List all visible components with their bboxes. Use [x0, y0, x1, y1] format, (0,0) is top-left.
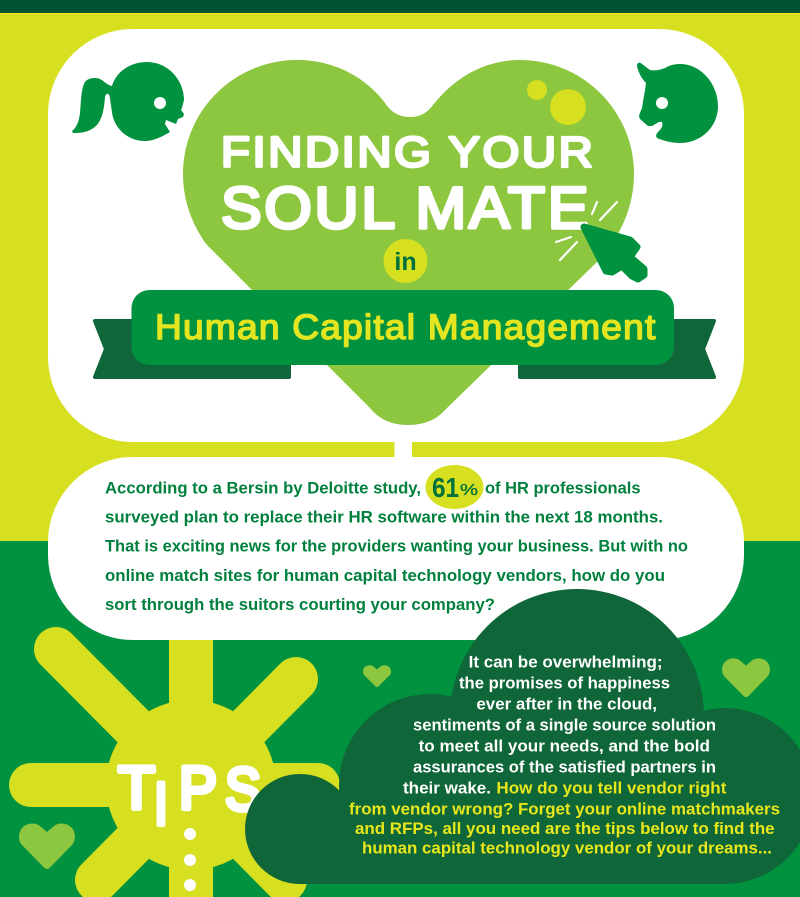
- tips heading: S: [225, 756, 261, 823]
- cloud text: It can be overwhelming;: [469, 654, 663, 672]
- tips dots: [184, 828, 196, 891]
- intro paragraph: That is exciting news for the providers wanting your business. But with no: [105, 538, 688, 556]
- intro paragraph: sort through the suitors courting your company?: [105, 596, 495, 614]
- cloud text: assurances of the satisfied partners in: [413, 758, 716, 776]
- intro paragraph: of HR professionals: [485, 480, 640, 498]
- 61% highlight: 61: [432, 472, 459, 503]
- intro paragraph: online match sites for human capital technology vendors, how do you: [105, 567, 665, 585]
- intro paragraph: According to a Bersin by Deloitte study,: [105, 480, 421, 498]
- tips heading: [118, 754, 261, 838]
- panel: intro text card: [48, 457, 744, 640]
- intro paragraph: [105, 480, 688, 614]
- connector between panels: [394, 440, 412, 460]
- cloud text: from vendor wrong? Forget your online matchmakers: [349, 800, 780, 818]
- tips heading: P: [179, 754, 217, 822]
- panel: title card: [48, 29, 744, 442]
- cloud text: ever after in the cloud,: [476, 696, 657, 714]
- ribbon banner: [95, 290, 714, 377]
- ribbon main bar: [132, 290, 674, 365]
- dark green cloud: [245, 589, 800, 884]
- heart: right: [722, 658, 770, 697]
- heart: lower left: [19, 823, 75, 869]
- cloud text: human capital technology vendor of your dreams...: [362, 840, 772, 858]
- cloud text: and RFPs, all you need are the tips below to find the: [355, 820, 775, 838]
- icon: girl head: [72, 62, 184, 141]
- 61% highlight: %: [460, 482, 478, 499]
- background: lime upper section: [0, 0, 800, 541]
- title: finding your soul mate: SOUL MATE: [221, 175, 588, 241]
- intro paragraph: surveyed plan to replace their HR software within the next 18 months.: [105, 509, 663, 527]
- badge: in: in: [394, 248, 417, 276]
- icon: boy head: [637, 63, 718, 143]
- tips heading: I: [154, 770, 168, 838]
- ribbon tail: right: [520, 321, 714, 377]
- cloud text: the promises of happiness: [459, 675, 670, 693]
- icon: cursor arrow with sparks: [556, 202, 644, 279]
- cloud text: [349, 654, 780, 858]
- ribbon tail: left: [95, 321, 289, 377]
- decorative lime bubbles: [527, 80, 586, 125]
- badge: in: [384, 239, 428, 283]
- tips sun icon: [31, 630, 318, 897]
- cloud text: sentiments of a single source solution: [413, 716, 716, 734]
- title: finding your soul mate: FINDING YOUR: [221, 127, 593, 176]
- top dark band: [0, 0, 800, 13]
- title: finding your soul mate: [221, 127, 593, 241]
- large heart behind title: [183, 60, 634, 425]
- 61% highlight: [426, 465, 484, 509]
- cloud text: How do you tell vendor right: [496, 779, 727, 797]
- tips heading: T: [118, 754, 155, 822]
- cloud text: to meet all your needs, and the bold: [419, 737, 710, 755]
- subtitle: human capital management: Human Capital Management: [155, 307, 655, 347]
- heart: small centre: [363, 665, 391, 687]
- cloud text: their wake.: [403, 779, 491, 797]
- background: green lower section: [0, 541, 800, 897]
